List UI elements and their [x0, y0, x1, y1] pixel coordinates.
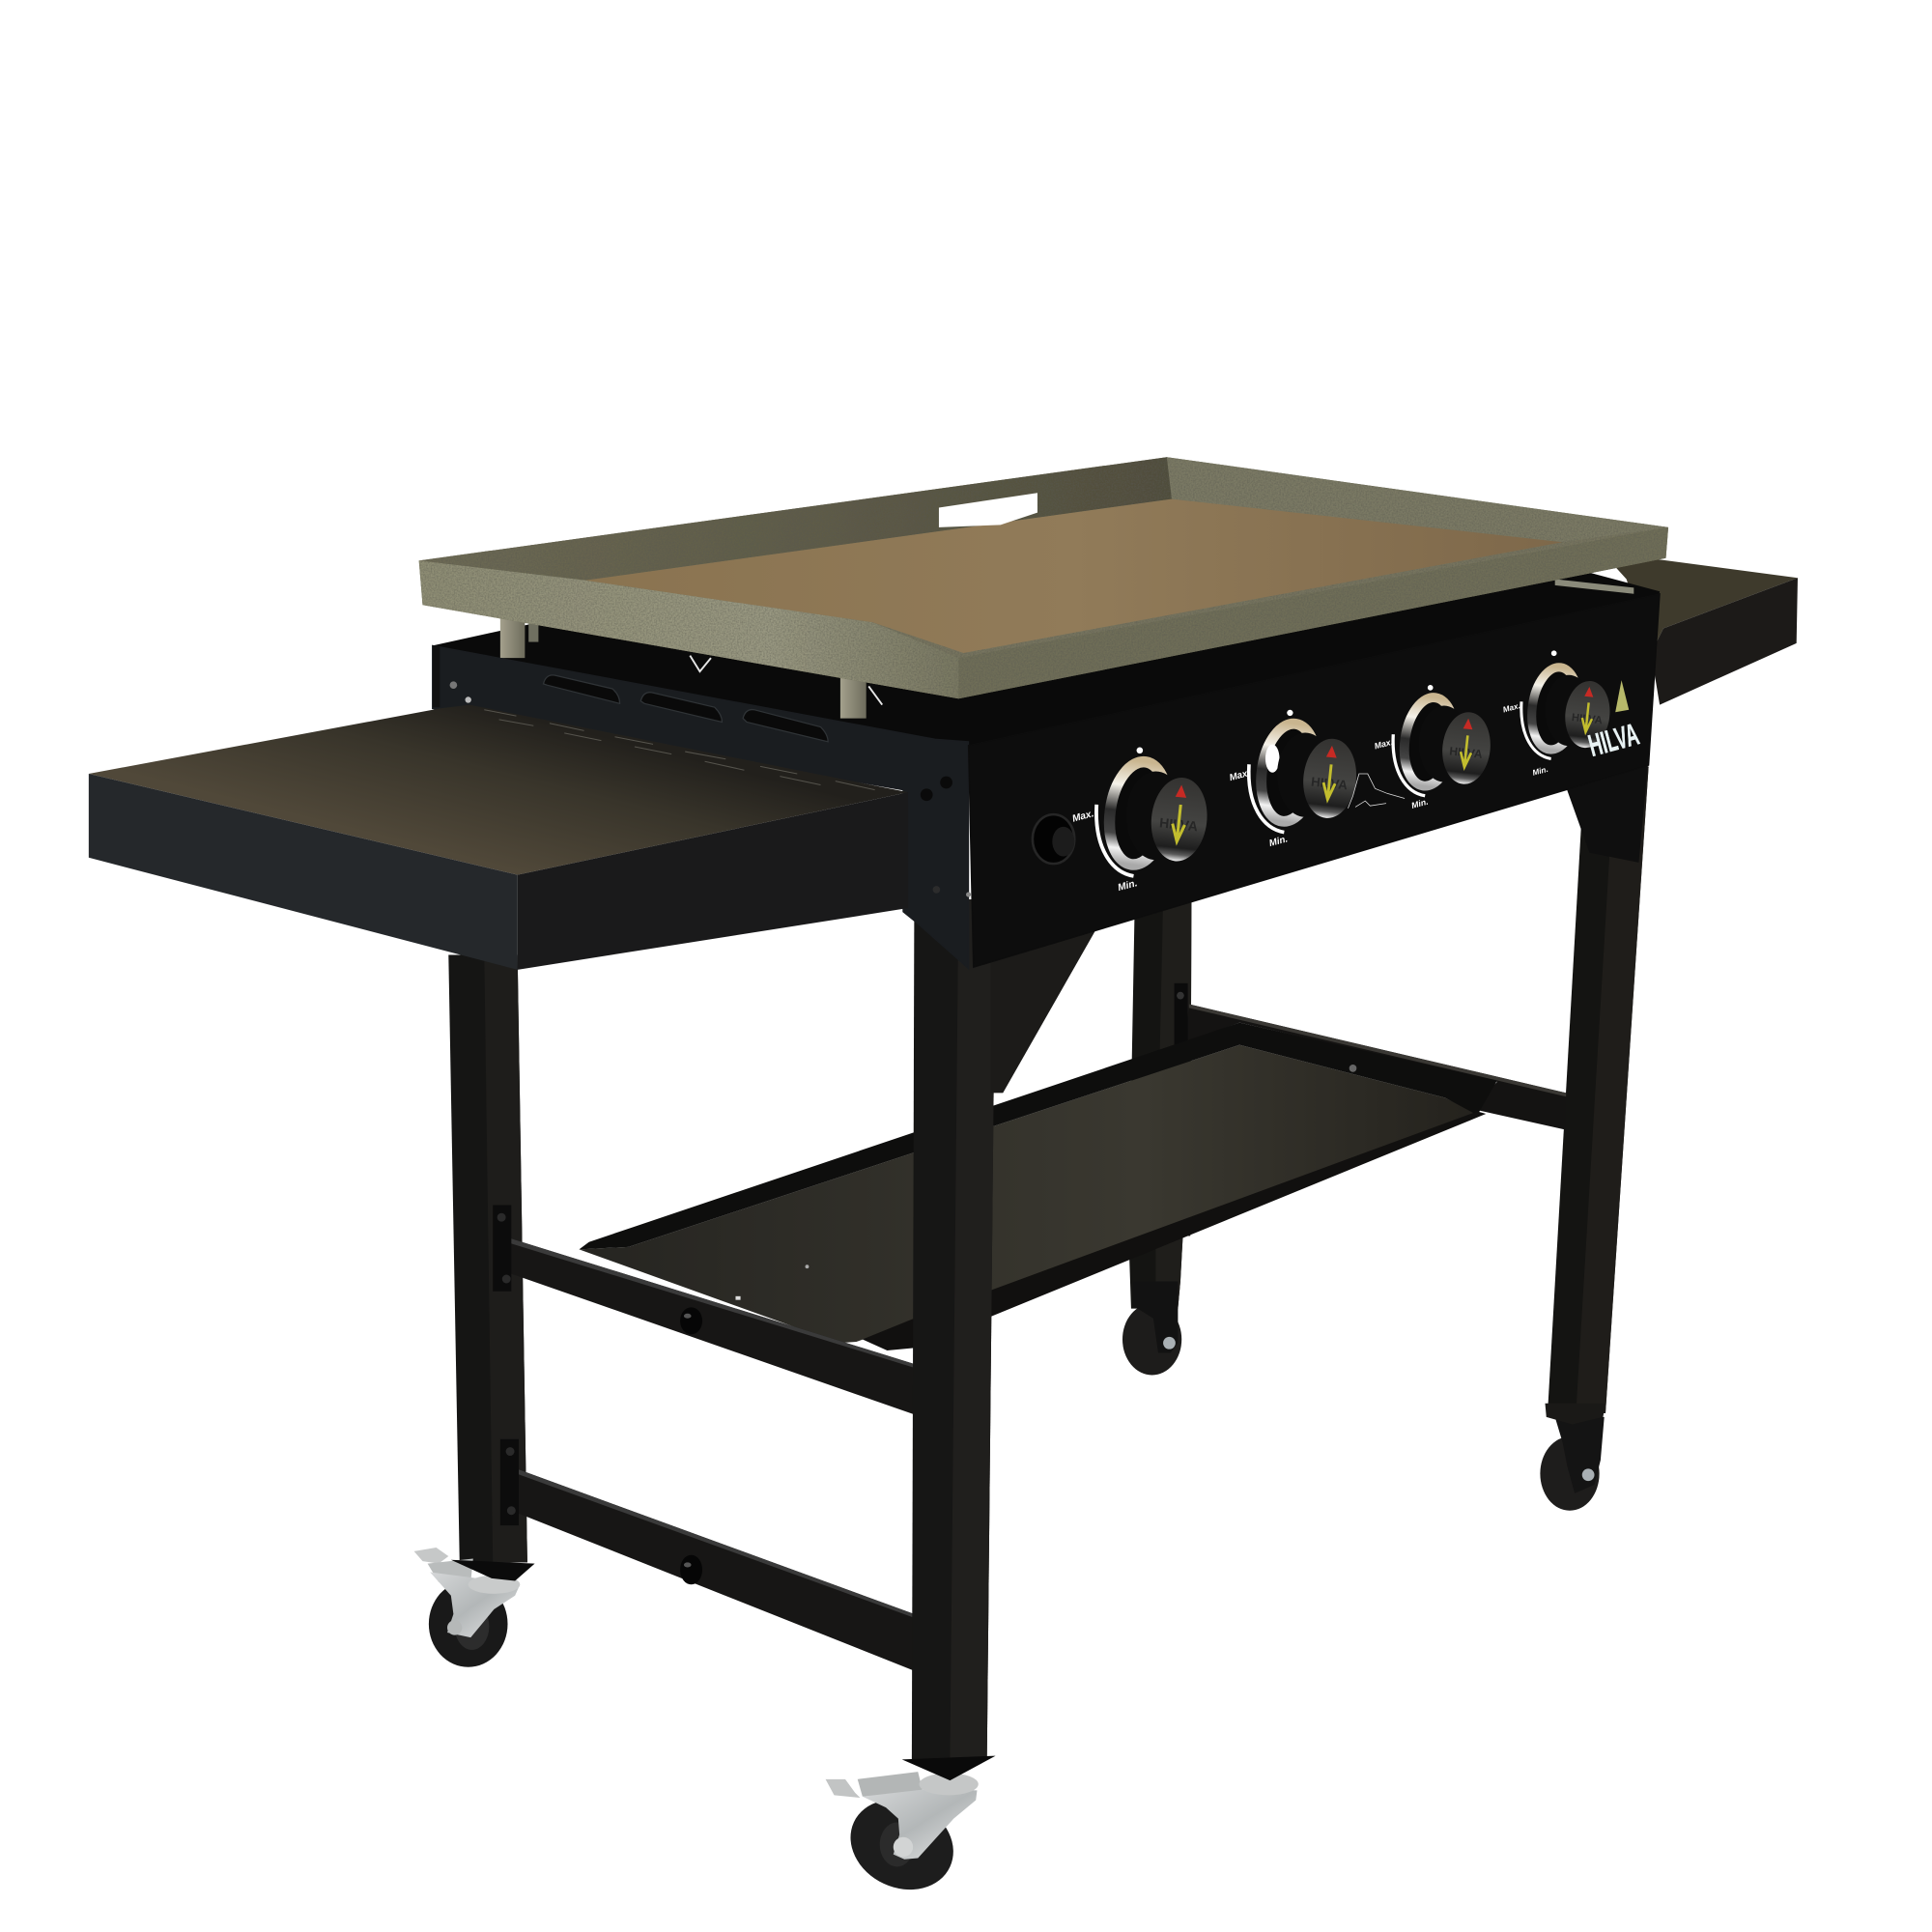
- back center caster: [1122, 1282, 1181, 1375]
- front caster: [826, 1756, 996, 1906]
- burner knob 3: Max.: [1374, 737, 1394, 751]
- griddle handle notch: [939, 493, 1037, 527]
- griddle body with grain: [419, 457, 1668, 698]
- vent 3: [743, 710, 828, 742]
- shelf lip: [579, 1023, 1497, 1249]
- table slot dashes: [484, 710, 875, 790]
- burner knob 3: HILVA: [1449, 744, 1484, 761]
- griddle support posts: [500, 616, 867, 719]
- left crossbar lower: [500, 1439, 914, 1671]
- table front face: [518, 792, 908, 970]
- back center leg: [1128, 894, 1191, 1309]
- front center leg: [912, 899, 996, 1759]
- brand logo: HILVA: [1584, 717, 1642, 763]
- crossbar knob upper: [680, 1307, 702, 1334]
- burner knob 2: [1229, 710, 1360, 849]
- left side panel with vents: [433, 645, 971, 969]
- vent 1: [543, 675, 620, 703]
- left rear caster: [414, 1548, 535, 1667]
- left brace: [991, 924, 1099, 1093]
- burner knob 4: Min.: [1531, 765, 1549, 778]
- burner knob 4: Max.: [1502, 701, 1521, 714]
- left crossbar upper: [493, 1205, 914, 1414]
- table left face: [89, 774, 518, 970]
- burner knob 3: Min.: [1410, 797, 1429, 810]
- burner knob 3: [1374, 685, 1493, 810]
- burner knob 1: Min.: [1117, 878, 1139, 894]
- griddle cooking surface: [585, 499, 1562, 653]
- left rear leg: [448, 955, 527, 1562]
- burner knob 4: [1502, 650, 1613, 778]
- griddle: [419, 457, 1668, 698]
- control panel: [969, 594, 1660, 967]
- vent 2: [640, 693, 722, 722]
- right brace: [1565, 757, 1649, 863]
- mountain line art: [1348, 774, 1405, 809]
- right side table: [1602, 552, 1798, 705]
- burner knob 2: HILVA: [1310, 775, 1349, 792]
- brand logo: [1584, 680, 1642, 763]
- burner knob 1: [1071, 747, 1211, 894]
- igniter button: [1033, 814, 1074, 864]
- burner knob 2: Max.: [1229, 768, 1251, 783]
- back crossbar: [1175, 983, 1566, 1130]
- right rear leg: [1548, 766, 1649, 1413]
- cooktop frame under griddle: [433, 569, 1660, 752]
- crossbar knob lower: [680, 1555, 702, 1584]
- shelf front edge: [863, 1112, 1486, 1350]
- burner knob 1: HILVA: [1158, 814, 1199, 834]
- burner knob 4: HILVA: [1571, 712, 1603, 726]
- burner knob 2: Min.: [1268, 834, 1289, 849]
- right rear caster: [1540, 1404, 1605, 1511]
- lower shelf: [579, 1023, 1497, 1350]
- burner knob 1: Max.: [1071, 809, 1095, 825]
- left side table: [89, 705, 908, 970]
